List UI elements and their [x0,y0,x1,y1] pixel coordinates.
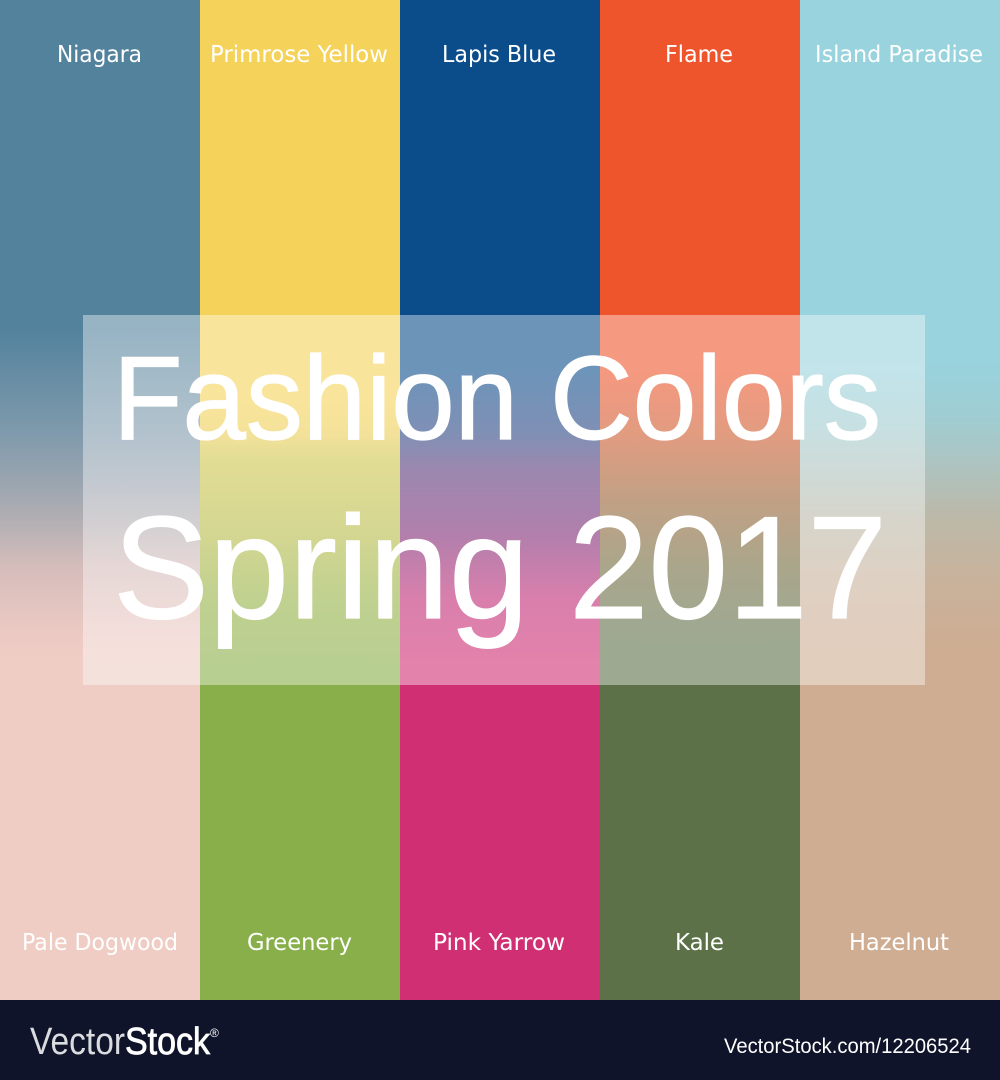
footer logo: ® [210,1026,219,1040]
title line 2 [113,486,887,649]
column: Primrose Yellow to Greenery [200,0,400,1000]
label: Niagara: Niagara [57,42,142,68]
top color labels [57,42,983,68]
label: Primrose Yellow: Primrose Yellow [210,42,388,68]
column: Flame to Kale [600,0,800,1000]
title line 1: Fashion [113,332,518,465]
column: Lapis Blue to Pink Yarrow [400,0,600,1000]
title line 1 [113,332,881,465]
title line 2: Spring [113,486,529,649]
column: Niagara to Pale Dogwood [0,0,200,1000]
footer bar [0,1000,1000,1080]
column: Island Paradise to Hazelnut [800,0,1000,1000]
title line 2: 2017 [569,486,887,649]
title line 1: Colors [550,332,881,465]
label: Lapis Blue: Lapis Blue [442,42,556,68]
bottom color labels [22,930,949,956]
label: Island Paradise: Island Paradise [815,42,983,68]
label: Kale: Kale [675,930,724,956]
footer logo: Vector [30,1021,125,1063]
label: Pale Dogwood: Pale Dogwood [22,930,178,956]
label: Hazelnut: Hazelnut [849,930,949,956]
label: Greenery: Greenery [247,930,352,956]
translucent title panel [83,315,925,685]
footer logo [30,1021,219,1063]
footer logo: Stock [125,1021,211,1063]
label: Flame: Flame [665,42,733,68]
footer image id: VectorStock.com/12206524 [724,1035,971,1058]
label: Pink Yarrow: Pink Yarrow [433,930,565,956]
